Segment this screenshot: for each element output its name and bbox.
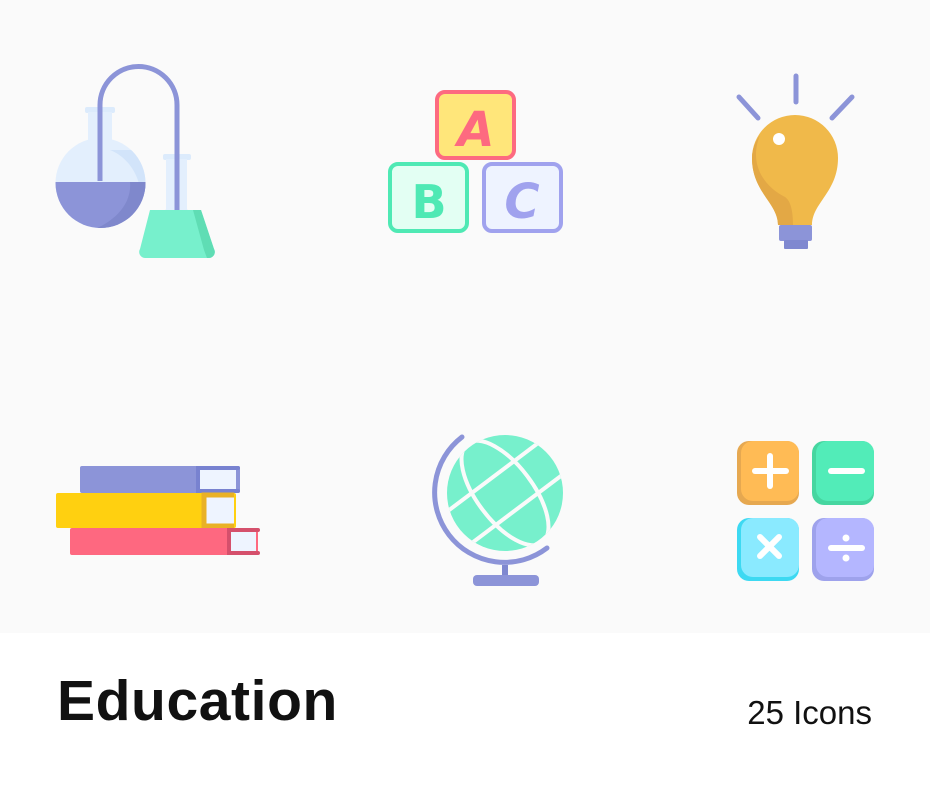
icon: chemistry flasks xyxy=(55,66,215,258)
icon: ABC blocks xyxy=(390,92,561,231)
icon: ABC blocks: B xyxy=(411,175,447,229)
icon: globe xyxy=(432,434,563,586)
title: Education xyxy=(57,669,338,733)
icon: ABC blocks: C xyxy=(504,174,540,230)
icon count: 25 Icons xyxy=(747,694,872,731)
icon: light bulb xyxy=(739,76,852,249)
icon: stack of books xyxy=(56,466,258,555)
icon: ABC blocks: A xyxy=(453,102,495,158)
icon: calculator operations xyxy=(737,441,874,581)
